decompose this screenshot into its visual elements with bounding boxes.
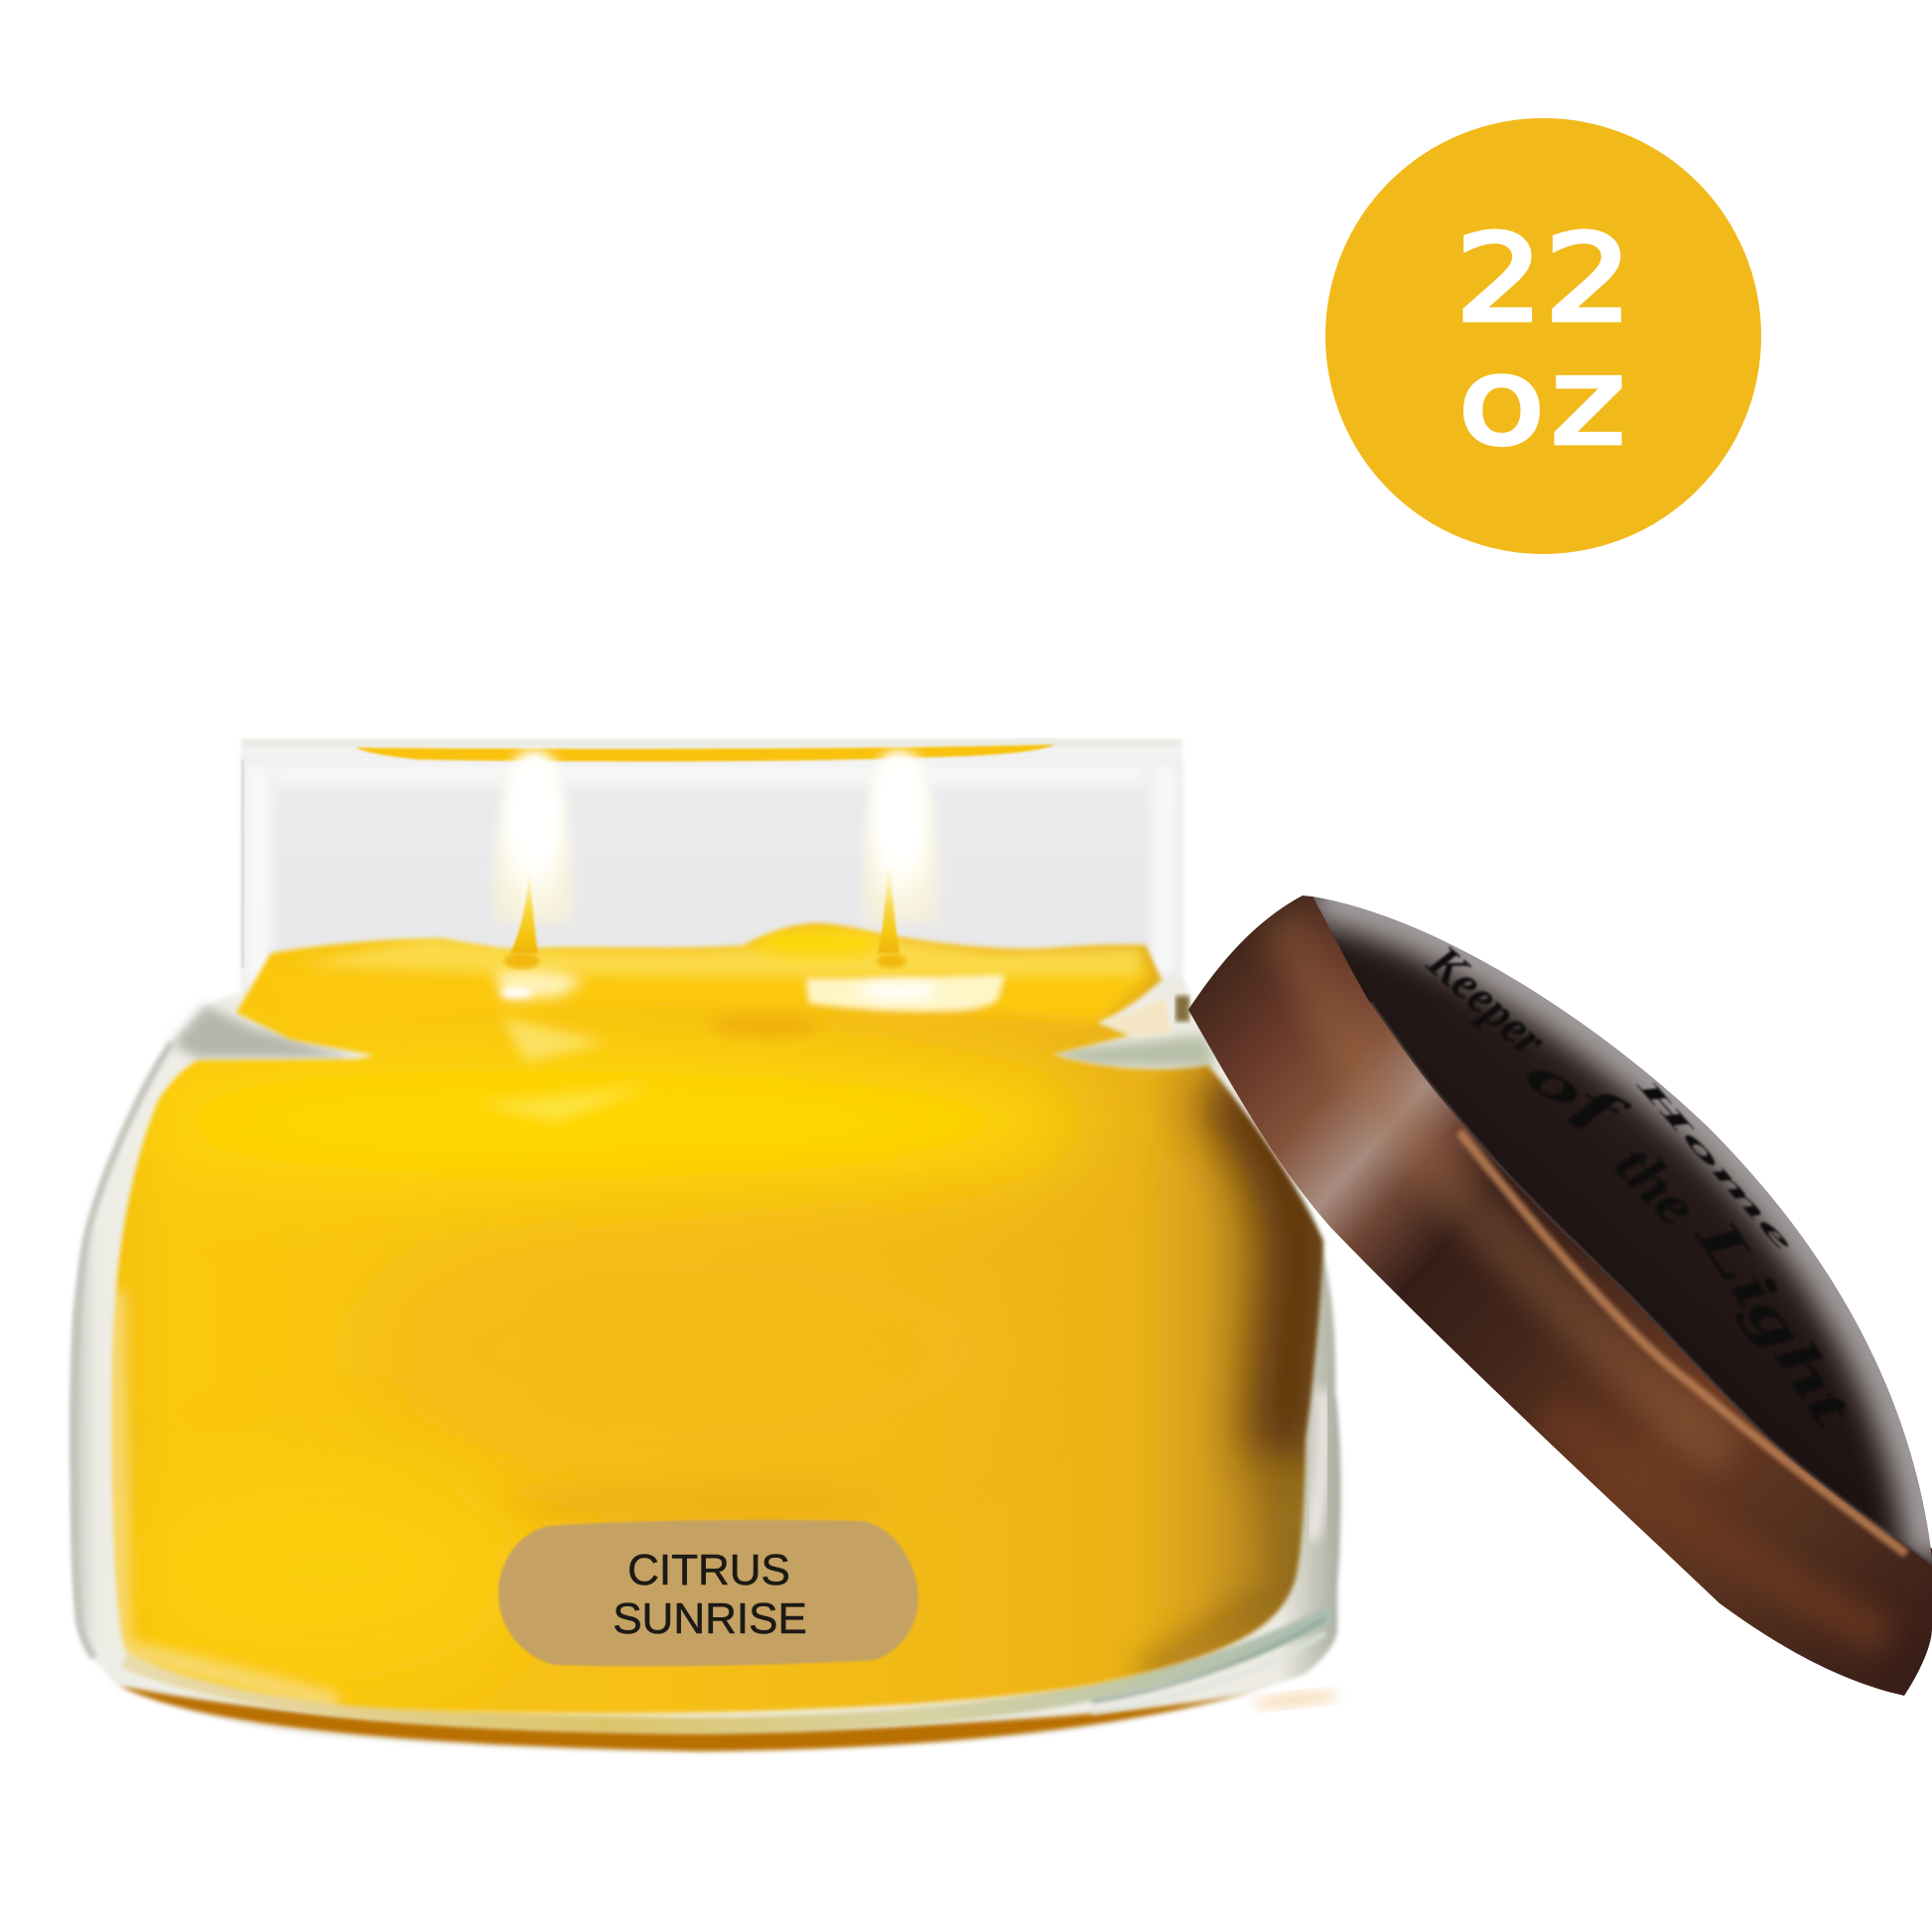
right shoulder glass (1033, 1035, 1215, 1067)
embossed lid text: Home (1632, 1071, 1798, 1257)
left shoulder glass shadow (172, 1006, 357, 1058)
size badge (1325, 118, 1761, 554)
embossed lid text: Light (1684, 1205, 1865, 1438)
label text: CITRUS (627, 1546, 790, 1594)
embossed lid text: Keeper (1417, 935, 1557, 1067)
right flame (864, 752, 938, 968)
candle lid (1181, 889, 1932, 1703)
embossed lid text: of (1517, 1044, 1637, 1146)
badge unit: oz (1458, 332, 1625, 471)
lower copper tone (1549, 1410, 1886, 1638)
lid top face (1301, 889, 1932, 1584)
base amber shadow (119, 1686, 1258, 1751)
rim wax reflection (355, 745, 1054, 761)
base glass ripple (124, 1613, 1330, 1725)
badge circle (1325, 118, 1761, 554)
left cream edge (115, 1291, 338, 1703)
lid rim (1181, 889, 1932, 1703)
product label (498, 1520, 918, 1666)
right peach reflection (1251, 1689, 1340, 1711)
wax fill (89, 913, 1340, 1737)
jar body glass (70, 978, 1341, 1751)
wax shading near label (506, 1482, 884, 1526)
embossed lid text (1417, 935, 1865, 1438)
right glass highlight (1312, 1390, 1324, 1539)
jar neck glass (241, 739, 1182, 999)
label text: SUNRISE (613, 1594, 807, 1643)
face outer light edge (1312, 897, 1932, 1559)
rim bright edge (1459, 1132, 1906, 1554)
upper wax band (268, 961, 1157, 1037)
lid shadow on wax (1221, 1082, 1299, 1459)
rim copper sheen (1281, 918, 1727, 1459)
candle jar (70, 739, 1341, 1751)
face inner dark line (1370, 1003, 1932, 1566)
badge number: 22 (1455, 210, 1632, 348)
melted wax highlights (493, 971, 584, 1001)
left flame (494, 752, 572, 969)
left outer glass edge (74, 1042, 172, 1658)
embossed lid text: the (1603, 1132, 1710, 1238)
